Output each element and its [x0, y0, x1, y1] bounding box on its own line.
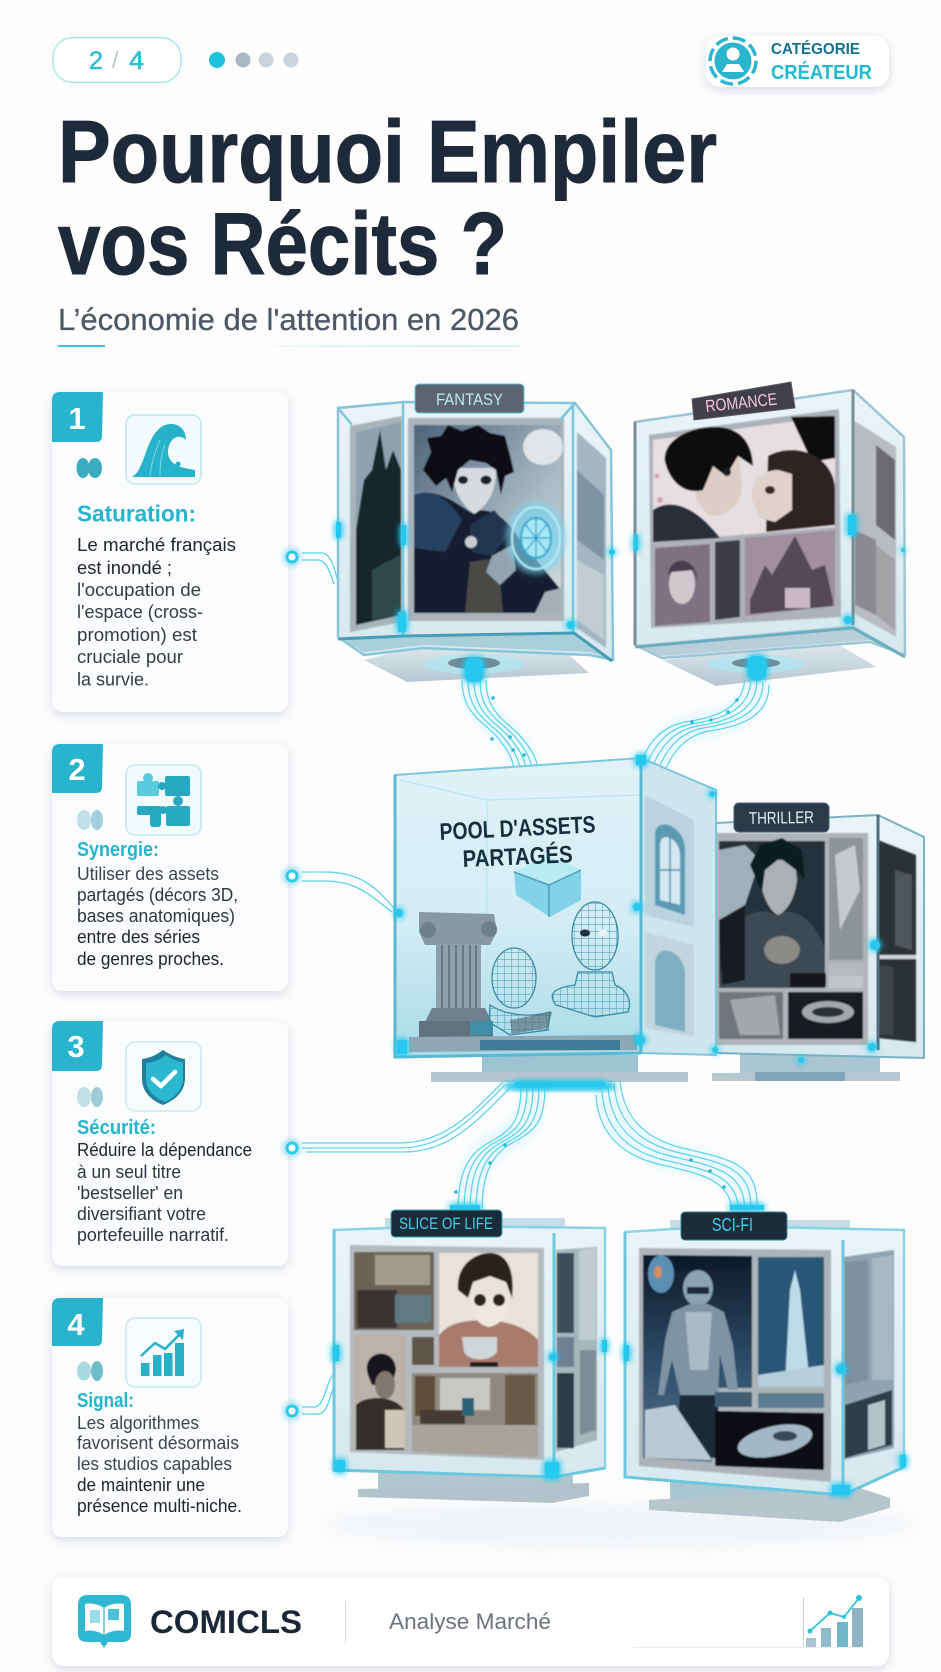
body text: de genres proches.: [77, 949, 224, 969]
wires: pool to sci-fi: [596, 1079, 757, 1220]
badge number 2: [52, 744, 103, 793]
body text: de maintenir une: [77, 1475, 205, 1495]
icon: growth chart: [126, 1318, 201, 1387]
front comic panel: [716, 833, 868, 1045]
label: fantasy: [415, 384, 524, 413]
column: [419, 912, 497, 1037]
icon: puzzle: [126, 765, 201, 835]
front comic panel: [408, 418, 566, 621]
body text: est inondé ;: [77, 558, 172, 578]
front comic panel: [350, 1245, 544, 1460]
label: sci-fi: [681, 1212, 787, 1240]
label: thriller: THRILLER: [749, 808, 814, 828]
badge number 4: [52, 1298, 103, 1346]
cube base: [482, 1055, 638, 1072]
heading: Sécurité:: [77, 1117, 156, 1139]
body text: la survie.: [77, 670, 149, 690]
body text: [77, 535, 236, 690]
front comic panel: [649, 409, 841, 628]
cube: fantasy: [336, 384, 615, 682]
wireframe bust: [552, 902, 629, 1017]
wires: pool to slice of life: [454, 1087, 545, 1212]
glass top plate: [385, 1218, 565, 1232]
label: romance: ROMANCE: [704, 390, 778, 416]
card 3: Sécurité: [52, 1021, 288, 1266]
right comic panel: [853, 420, 896, 637]
pool heading: PARTAGÉS: [462, 840, 573, 873]
mini chart: [633, 1595, 866, 1648]
body text: partagés (décors 3D,: [77, 885, 238, 905]
icon: creator avatar: [710, 38, 756, 84]
title: [58, 102, 717, 293]
badge number 1: 1: [68, 401, 86, 436]
cube base: [662, 642, 876, 686]
glass shell: [338, 402, 613, 660]
logo: open book: [78, 1595, 131, 1648]
card 4: Signal: [52, 1298, 288, 1537]
label: slice of life: SLICE OF LIFE: [399, 1214, 493, 1233]
heading: Saturation:: [77, 500, 196, 526]
badge number 2: 2: [68, 752, 86, 787]
label: sci-fi: SCI-FI: [712, 1215, 753, 1235]
glow nodes: [395, 755, 718, 1087]
body text: portefeuille narratif.: [77, 1225, 229, 1245]
right glass face: [641, 758, 716, 1055]
side window panels: [645, 795, 694, 1037]
cube: thriller: [712, 803, 924, 1081]
cube: sci-fi: [624, 1205, 906, 1522]
card 2: Synergie: [52, 744, 288, 991]
cube: slice of life: [333, 1205, 607, 1503]
title: vos Récits ?: [58, 194, 507, 293]
right comic panel: [577, 432, 606, 648]
glass wire cube: [514, 856, 581, 917]
glow nodes: [624, 1205, 906, 1495]
body text: 'bestseller' en: [77, 1183, 183, 1203]
card 1: Saturation: [52, 392, 288, 712]
front comic panel: [639, 1248, 831, 1482]
body text: l'occupation de: [77, 580, 201, 600]
category badge: CATÉGORIE: [771, 39, 860, 58]
icon: small brain: [77, 1087, 103, 1107]
left comic panel: [350, 416, 402, 632]
body text: [77, 864, 238, 969]
body text: les studios capables: [77, 1454, 232, 1474]
label: thriller: [734, 803, 829, 832]
body text: présence multi-niche.: [77, 1496, 242, 1516]
badge number 3: [52, 1021, 103, 1071]
glow nodes: [798, 940, 880, 1063]
right comic panel: [878, 840, 916, 1042]
body text: favorisent désormais: [77, 1433, 239, 1453]
pool heading: POOL D'ASSETS: [439, 811, 596, 846]
connector wires: [302, 553, 769, 1414]
icon: small brain: [77, 1361, 103, 1381]
body text: Utiliser des assets: [77, 864, 219, 884]
body text: l'espace (cross-: [77, 602, 203, 622]
glow nodes: [336, 522, 615, 682]
platform: [409, 1035, 637, 1052]
frame edges: [338, 402, 575, 635]
body text: [77, 1413, 242, 1516]
cube: pool of shared assets: [395, 755, 718, 1090]
body text: entre des séries: [77, 927, 200, 947]
category badge: [706, 36, 889, 87]
header: pagination pill and dots: [53, 38, 298, 82]
wires: romance to pool: [640, 676, 769, 773]
body text: Réduire la dépendance: [77, 1140, 252, 1160]
label: slice of life: [391, 1210, 502, 1237]
right comic panel: [843, 1250, 894, 1460]
footer bar: [52, 1577, 889, 1666]
glass shell: [625, 1226, 904, 1495]
wires: fantasy to pool: [462, 680, 538, 768]
glass shell: [635, 390, 905, 658]
glow nodes: [634, 515, 905, 680]
header: pagination pill and dots: 4: [129, 47, 144, 75]
glass shell: [716, 815, 924, 1058]
cube base: [740, 1053, 880, 1073]
header: pagination pill and dots: 2: [89, 47, 103, 75]
body text: bases anatomiques): [77, 906, 235, 926]
label: romance: [692, 382, 795, 420]
icon: wave: [126, 415, 201, 484]
heading: Synergie:: [77, 839, 159, 861]
body text: diversifiant votre: [77, 1204, 206, 1224]
title: Pourquoi Empiler: [58, 102, 717, 201]
right comic panel: [556, 1247, 597, 1452]
wires: card connectors: [302, 553, 509, 1414]
badge number 4: 4: [67, 1307, 85, 1342]
glow nodes: [333, 1205, 607, 1478]
cube base: [364, 645, 589, 682]
category badge: CRÉATEUR: [771, 61, 873, 84]
ground reflection: [320, 1503, 920, 1547]
subtitle: L’économie de l'attention en 2026: [58, 302, 519, 337]
glass shell: [334, 1226, 605, 1477]
connector nodes: [287, 552, 297, 1416]
glass top plate: [670, 1220, 850, 1240]
cube base: [378, 1465, 573, 1489]
cube base: [670, 1478, 860, 1502]
header: pagination pill and dots: /: [112, 47, 119, 73]
label: fantasy: FANTASY: [436, 390, 503, 409]
icon: small brain: [76, 458, 102, 478]
pool heading: [439, 811, 596, 873]
footer label: Analyse Marché: [389, 1609, 551, 1634]
badge number 3: 3: [67, 1029, 85, 1064]
body text: Les algorithmes: [77, 1413, 199, 1433]
body text: à un seul titre: [77, 1162, 181, 1182]
heading: Signal:: [77, 1390, 134, 1412]
body text: promotion) est: [77, 625, 197, 645]
front glass face: [395, 758, 641, 1057]
cube: romance: [634, 382, 905, 686]
body text: Le marché français: [77, 535, 236, 555]
badge number 1: [52, 392, 103, 442]
icon: small brain: [77, 810, 103, 830]
body text: cruciale pour: [77, 647, 183, 667]
body text: [77, 1140, 252, 1245]
icon: shield: [126, 1042, 201, 1111]
wireframe head: [489, 948, 552, 1035]
brand name: COMICLS: [150, 1604, 302, 1640]
